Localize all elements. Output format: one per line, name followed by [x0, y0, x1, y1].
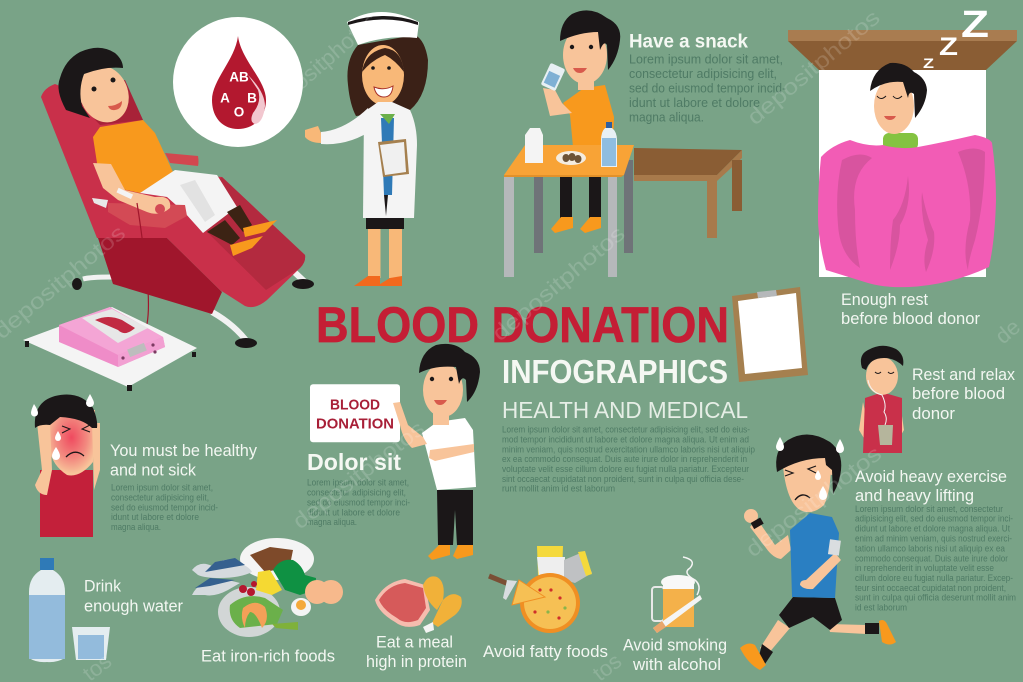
- text block: have a snack: sed do eiusmod tempor incid-: [629, 82, 786, 96]
- text block: healthy and not sick: idunt ut labore et dolore: [111, 512, 199, 523]
- blanket: [818, 135, 996, 287]
- icon: sleeping Zzz: Z: [961, 4, 989, 46]
- watermarks: depositphotos: [742, 5, 885, 130]
- caption: avoid smoking with alcohol: [623, 636, 727, 674]
- subtitle: infographics: INFOGRAPHICS: [502, 353, 728, 390]
- head: [578, 76, 594, 90]
- text block: have a snack: Have a snack: [629, 30, 748, 52]
- intro paragraph: [502, 425, 755, 495]
- text block: dolor sit: [307, 449, 410, 528]
- sign: blood donation: [310, 384, 400, 442]
- icon: sleeping Zzz: [923, 4, 989, 71]
- illustration: man relaxing with earphones: [859, 346, 904, 453]
- person legs: [560, 175, 572, 219]
- patient's shirt: [93, 120, 173, 193]
- arm: [93, 163, 170, 214]
- trousers: [140, 170, 237, 233]
- back legs: [534, 177, 543, 253]
- text block: avoid heavy exercise: Avoid heavy exercise: [855, 467, 1007, 486]
- intro paragraph: Lorem ipsum dolor sit amet, consectetur adipisicing elit, sed do eius-: [502, 425, 750, 436]
- subtitle: health and medical: HEALTH AND MEDICAL: [502, 397, 748, 423]
- icon: beer mug and cigarette: [652, 557, 702, 633]
- caption: avoid smoking with alcohol: with alcohol: [632, 655, 721, 674]
- sign: blood donation: DONATION: [316, 416, 394, 433]
- icon: blank clipboard: [732, 287, 808, 382]
- water bottle: [606, 122, 612, 128]
- icon: water bottle and glass: [29, 558, 110, 662]
- icon: blood type drop in white circle: B: [247, 91, 257, 106]
- text block: avoid heavy exercise: id est laborum: [855, 603, 907, 614]
- IV tube: [130, 203, 148, 336]
- text block: dolor sit: consectetur adipisicing elit,: [307, 488, 406, 499]
- milk carton: [525, 128, 543, 163]
- illustration: donor reclining in donation chair: [41, 48, 314, 348]
- table top: [504, 145, 634, 175]
- text block: have a snack: idunt ut labore et dolore: [629, 96, 760, 110]
- intro paragraph: ex ea commodo consequat. Duis aute irure dolor in reprehenderit in: [502, 454, 747, 465]
- text block: healthy and not sick: consectetur adipisicing elit,: [111, 492, 209, 503]
- intro paragraph: sint occaecat cupidatat non proident, sunt in culpa qui officia dese-: [502, 474, 744, 485]
- text block: dolor sit: Lorem ipsum dolor sit amet,: [307, 478, 409, 489]
- text block: have a snack: magna aliqua.: [629, 111, 704, 125]
- sign: blood donation: BLOOD: [330, 396, 380, 413]
- intro paragraph: runt mollit anim id est laborum: [502, 484, 615, 495]
- caption: drink enough water: Drink: [84, 577, 121, 596]
- icon: fatty foods, fries and pizza: [489, 546, 592, 633]
- icon: blood type drop in white circle: A: [220, 91, 230, 106]
- glass: [541, 63, 565, 91]
- legs: [207, 220, 240, 245]
- icon: sleeping Zzz: Z: [923, 55, 935, 71]
- head: [71, 58, 137, 130]
- caption: eat a meal high in protein: [366, 632, 467, 671]
- bench: [634, 148, 742, 175]
- watermarks: depositphotos: [259, 8, 382, 120]
- text block: healthy and not sick: magna aliqua.: [111, 522, 161, 533]
- caption: eat a meal high in protein: Eat a meal: [376, 632, 453, 651]
- text block: have a snack: [629, 30, 786, 125]
- intro paragraph: minim veniam, quis nostrud exercitation ullamco laboris nisi ut aliquip: [502, 444, 755, 455]
- caption: eat iron-rich foods: Eat iron-rich foods: [201, 647, 335, 666]
- caption: avoid fatty foods: Avoid fatty foods: [483, 642, 608, 661]
- text block: avoid heavy exercise: tation ullamco laboris nisi ut aliquip ex ea: [855, 543, 1006, 554]
- caption: enough rest: before blood donor: [841, 309, 980, 328]
- caption: rest and relax: before blood: [912, 384, 1005, 403]
- text block: dolor sit: Dolor sit: [307, 449, 401, 475]
- text block: healthy and not sick: sed do eiusmod tempor incid-: [111, 502, 218, 513]
- text block: healthy and not sick: and not sick: [110, 461, 196, 480]
- text block: dolor sit: magna aliqua.: [307, 517, 357, 528]
- text block: avoid heavy exercise: Lorem ipsum dolor sit amet, consectetur: [855, 504, 1003, 515]
- illustration: sick man with flushed face: [31, 394, 100, 537]
- illustration: sweating runner: [740, 434, 896, 670]
- caption: rest and relax: [912, 365, 1015, 423]
- illustration: person sleeping in bed: [788, 30, 1017, 287]
- watermarks: depositphotos: [288, 416, 429, 534]
- plate of snacks: [556, 151, 586, 165]
- text block: avoid heavy exercise: [855, 467, 1016, 614]
- watermarks: depositphotos: [741, 441, 886, 562]
- illustration: blood bag machine on tray: [23, 307, 197, 391]
- icon: blood type drop in white circle: [173, 17, 303, 147]
- watermarks: depositphotos: [487, 221, 630, 346]
- icon: blood type drop in white circle: AB: [229, 70, 249, 85]
- torso: [563, 85, 614, 147]
- illustration: boy holding sign: [393, 344, 480, 560]
- icon: iron-rich foods: [192, 538, 343, 637]
- illustration: boy having a snack at table: [504, 10, 742, 277]
- text block: healthy and not sick: [110, 441, 257, 533]
- text block: have a snack: consectetur adipisicing elit,: [629, 67, 777, 81]
- text block: healthy and not sick: You must be healthy: [110, 441, 257, 460]
- text block: have a snack: Lorem ipsum dolor sit amet,: [629, 52, 783, 66]
- intro paragraph: voluptate velit esse cillum dolore eu fugiat nulla pariatur. Excepteur: [502, 464, 749, 475]
- icon: blood type drop in white circle: O: [234, 105, 244, 120]
- text block: dolor sit: sed do eiusmod tempor inci-: [307, 497, 410, 508]
- caption: rest and relax: Rest and relax: [912, 365, 1015, 384]
- armrest: [108, 203, 187, 228]
- caption: eat a meal high in protein: high in protein: [366, 652, 467, 671]
- caption: enough rest: Enough rest: [841, 290, 928, 309]
- icon: meat and chicken: [375, 576, 462, 633]
- text block: avoid heavy exercise: in reprehenderit in voluptate velit esse: [855, 563, 994, 574]
- icon: sleeping Zzz: Z: [939, 33, 958, 61]
- text block: avoid heavy exercise: and heavy lifting: [855, 486, 974, 505]
- caption: enough rest: [841, 290, 980, 328]
- illustration: nurse with clipboard: [305, 12, 428, 286]
- caption: drink enough water: [84, 577, 183, 616]
- caption: rest and relax: donor: [912, 404, 955, 423]
- main title: BLOOD DONATION: [316, 297, 729, 353]
- text block: dolor sit: didunt ut labore et dolore: [307, 507, 400, 518]
- text block: healthy and not sick: Lorem ipsum dolor sit amet,: [111, 483, 213, 494]
- caption: drink enough water: enough water: [84, 597, 183, 616]
- intro paragraph: mod tempor incididunt ut labore et dolore magna aliqua. Ut enim ad: [502, 435, 749, 446]
- caption: avoid smoking with alcohol: Avoid smoking: [623, 636, 727, 655]
